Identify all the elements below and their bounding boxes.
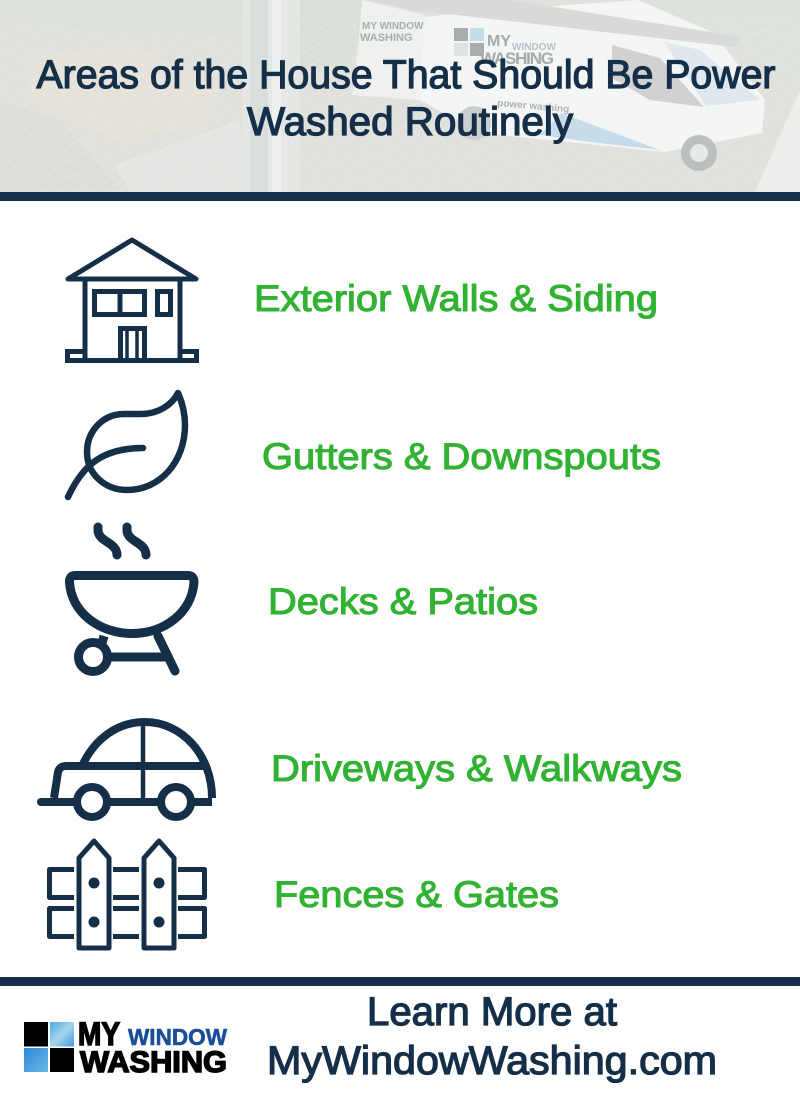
- top divider: [0, 192, 800, 201]
- call to action: [267, 990, 717, 1083]
- icon: car: [41, 722, 212, 817]
- header photo background: WASHING: [360, 32, 413, 44]
- header photo background: power washing: [497, 98, 570, 115]
- label: fences: Fences & Gates: [274, 873, 559, 915]
- label: exterior walls: Exterior Walls & Siding: [254, 277, 658, 319]
- header photo background: MY: [487, 33, 511, 50]
- icon: fence: [50, 841, 204, 948]
- label: driveways: Driveways & Walkways: [271, 747, 682, 789]
- logo: WASHING: [80, 1046, 227, 1079]
- logo: WINDOW: [128, 1024, 227, 1050]
- call to action: Learn More at: [367, 990, 617, 1034]
- title: Washed Routinely: [247, 100, 573, 144]
- icon: grill: [70, 527, 194, 672]
- icon: house: [68, 240, 196, 360]
- logo: [24, 1016, 227, 1079]
- header photo background: [0, 0, 800, 192]
- logo: MY: [78, 1016, 120, 1052]
- bottom divider: [0, 977, 800, 986]
- header photo background: WINDOW: [512, 42, 556, 53]
- header photo background: WASHING: [480, 49, 554, 68]
- header photo background: MY WINDOW: [362, 21, 424, 32]
- van: [352, 0, 425, 100]
- label: gutters: Gutters & Downspouts: [262, 435, 661, 477]
- call to action: MyWindowWashing.com: [267, 1039, 717, 1083]
- title: Areas of the House That Should Be Power: [36, 53, 776, 97]
- icon: leaf: [68, 393, 185, 497]
- label: decks: Decks & Patios: [268, 580, 538, 622]
- title: [36, 53, 776, 144]
